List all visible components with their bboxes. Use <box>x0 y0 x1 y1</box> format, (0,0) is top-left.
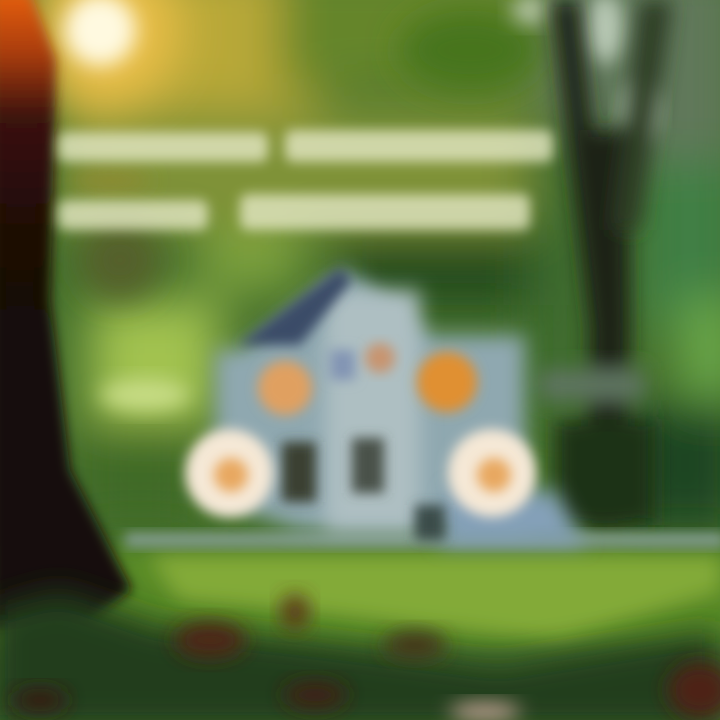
grass lawn <box>0 548 720 648</box>
left tree trunk <box>0 0 132 630</box>
roof <box>238 268 352 345</box>
windows <box>282 350 445 540</box>
title line 1 <box>58 130 553 162</box>
right tree trunk <box>540 0 672 530</box>
white badge left <box>185 429 273 517</box>
white badge right <box>448 429 536 517</box>
orange circle left <box>258 361 312 415</box>
title: illegible blurred heading, two lines <box>58 130 553 230</box>
path <box>125 532 720 548</box>
dark foreground with leaves <box>0 590 720 720</box>
house body <box>215 268 525 530</box>
house <box>185 268 585 545</box>
orange circle small <box>365 343 395 373</box>
title line 2 <box>58 194 530 230</box>
orange circle right <box>417 352 477 412</box>
sun glare <box>20 0 180 110</box>
